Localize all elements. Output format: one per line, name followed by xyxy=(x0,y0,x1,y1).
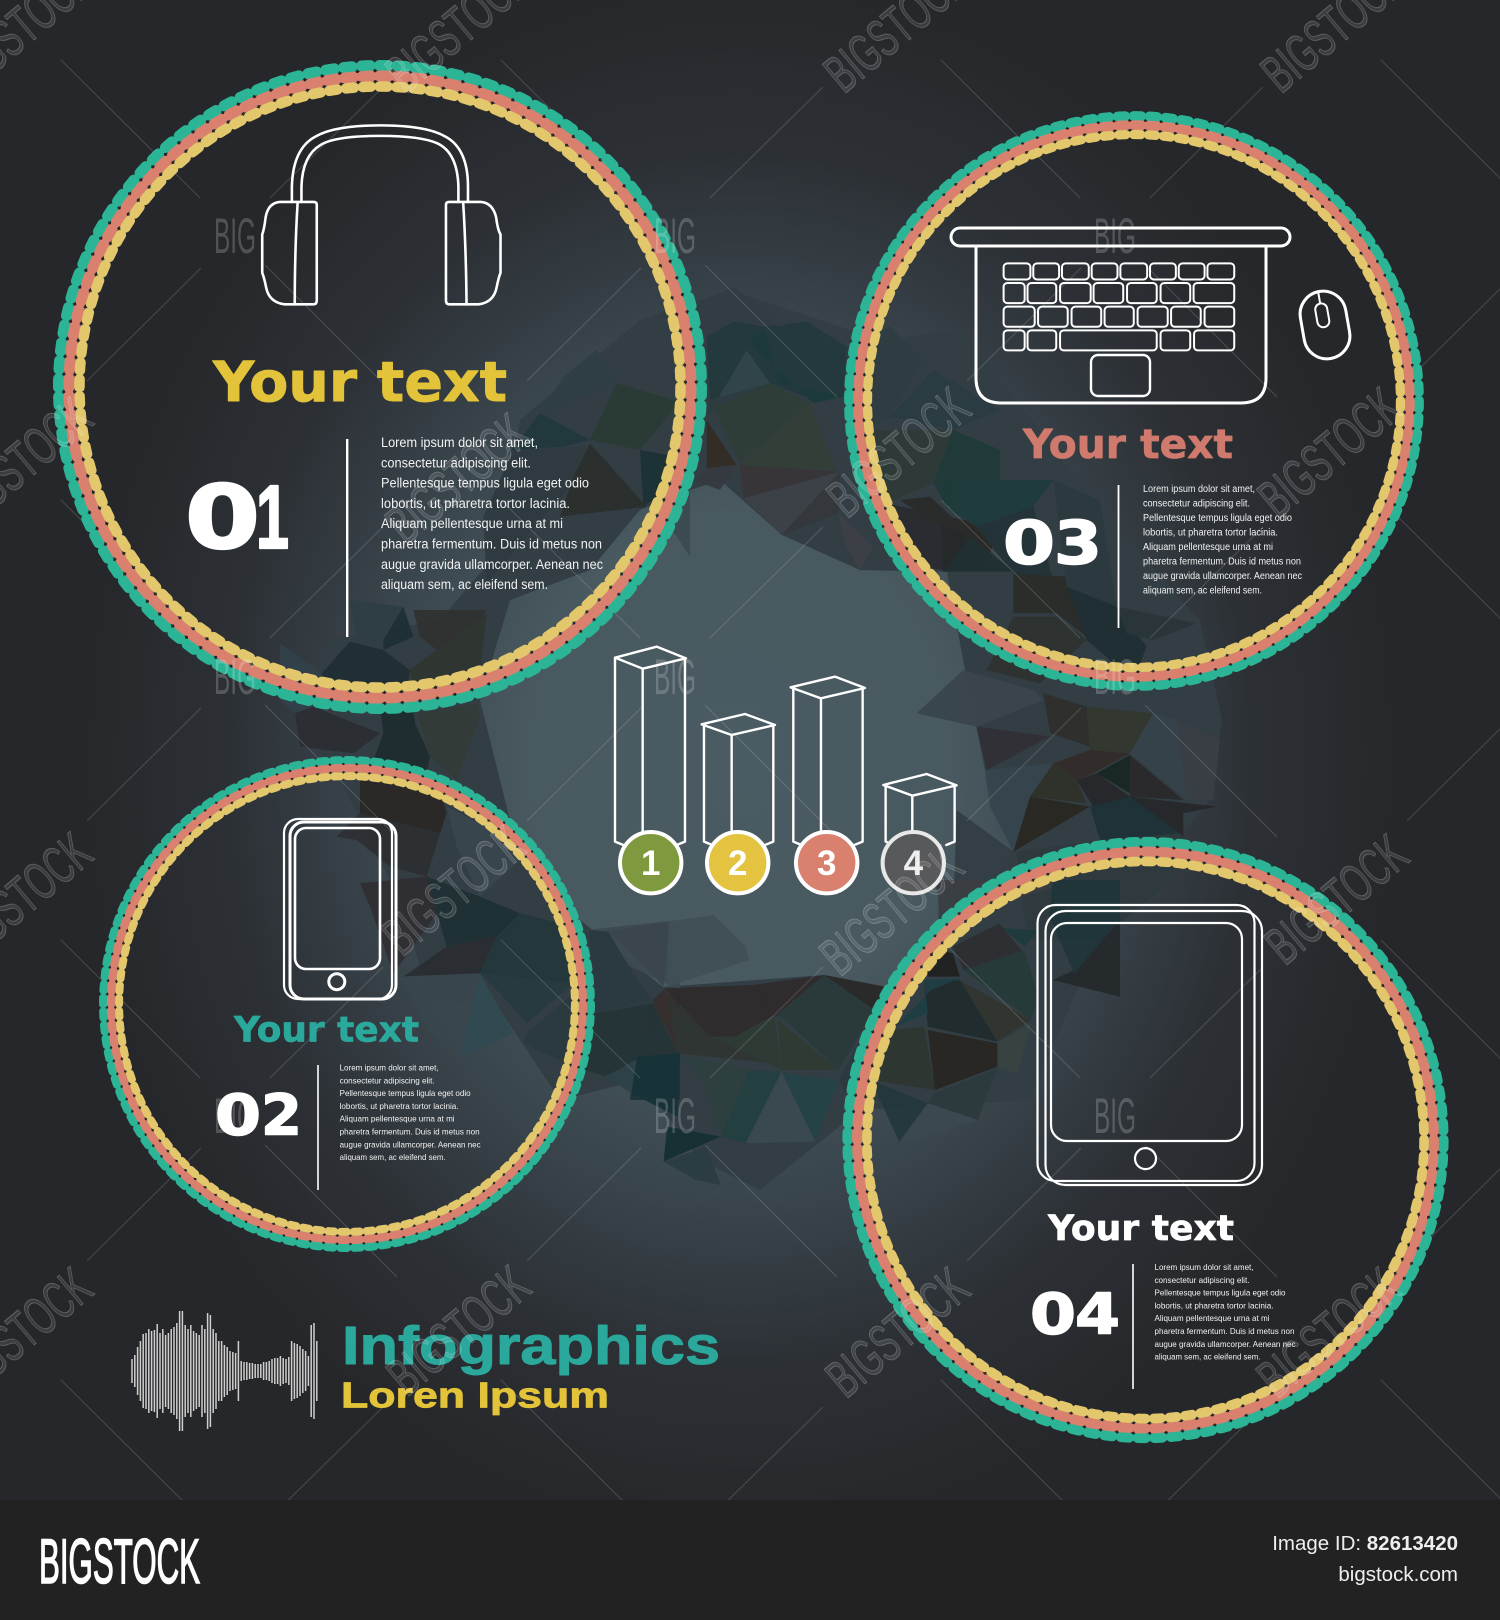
body text 03 xyxy=(1143,484,1302,596)
body text 03: augue gravida ullamcorper. Aenean nec xyxy=(1143,571,1302,582)
body text 03: Lorem ipsum dolor sit amet, xyxy=(1143,484,1255,495)
body text 02: lobortis, ut pharetra tortor lacinia. xyxy=(340,1101,459,1111)
ring 01 xyxy=(58,66,702,708)
badge 1: 1 xyxy=(641,844,660,883)
watermarks: BIGSTOCK xyxy=(376,1255,541,1407)
main title: Infographics xyxy=(342,1316,720,1376)
number 02: 2 xyxy=(261,1084,302,1148)
circle panel 01 xyxy=(58,66,702,708)
number 04: 4 xyxy=(1075,1282,1120,1348)
icon: smartphone xyxy=(284,819,396,999)
body text 01: consectetur adipiscing elit. xyxy=(381,455,531,470)
watermarks: BIG xyxy=(654,1088,696,1144)
body text 02: consectetur adipiscing elit. xyxy=(340,1075,435,1085)
badge 1 xyxy=(620,832,681,893)
icon: headphones xyxy=(262,125,501,304)
body text 04 xyxy=(1154,1262,1296,1362)
subtitle: Loren Ipsum xyxy=(341,1375,609,1416)
icon: mouse xyxy=(1296,288,1354,362)
number 03: 0 xyxy=(1003,508,1055,578)
heading 04: Your text xyxy=(1047,1209,1234,1249)
body text 03: lobortis, ut pharetra tortor lacinia. xyxy=(1143,528,1278,538)
body text 02: Pellentesque tempus ligula eget odio xyxy=(340,1088,471,1098)
body text 03: pharetra fermentum. Duis id metus non xyxy=(1143,556,1301,568)
footer site: bigstock.com xyxy=(1338,1563,1458,1586)
body text 02 xyxy=(340,1062,481,1162)
divider 03 xyxy=(1118,485,1119,628)
body text 04: consectetur adipiscing elit. xyxy=(1154,1275,1250,1285)
watermarks: BIG xyxy=(1094,649,1136,705)
number 03: 3 xyxy=(1054,508,1102,578)
body text 04: lobortis, ut pharetra tortor lacinia. xyxy=(1154,1300,1274,1310)
number 01: 1 xyxy=(256,468,289,568)
body text 04: Aliquam pellentesque urna at mi xyxy=(1154,1313,1270,1323)
watermarks: BIG xyxy=(214,208,256,264)
body text 01: lobortis, ut pharetra tortor lacinia. xyxy=(381,496,570,511)
body text 01 xyxy=(381,435,603,592)
watermarks: BIG xyxy=(1094,208,1136,264)
watermarks: BIGSTOCK xyxy=(816,377,981,529)
body text 04: augue gravida ullamcorper. Aenean nec xyxy=(1154,1339,1296,1349)
body text 02: Lorem ipsum dolor sit amet, xyxy=(340,1062,439,1072)
body text 03: consectetur adipiscing elit. xyxy=(1143,498,1250,510)
badge 2: 2 xyxy=(728,844,747,883)
body text 01: Lorem ipsum dolor sit amet, xyxy=(381,435,538,450)
watermarks: BIGSTOCK xyxy=(375,403,540,555)
text: BIGSTOCK xyxy=(39,1527,200,1597)
watermarks: BIGSTOCK xyxy=(371,815,536,967)
badge 3: 3 xyxy=(817,844,836,883)
body text 01: aliquam sem, ac eleifend sem. xyxy=(381,577,548,592)
circle panel 03 xyxy=(849,116,1419,686)
watermarks: BIG xyxy=(654,649,696,705)
body text 03: Pellentesque tempus ligula eget odio xyxy=(1143,513,1292,524)
body text 04: Pellentesque tempus ligula eget odio xyxy=(1154,1288,1286,1298)
body text 01: augue gravida ullamcorper. Aenean nec xyxy=(381,557,603,572)
watermarks: BIGSTOCK xyxy=(809,835,974,987)
footer image id: Image ID: 82613420 xyxy=(1272,1532,1458,1555)
low-poly mesh ring xyxy=(280,287,1222,1190)
keyboard keys xyxy=(1004,263,1234,350)
divider 04 xyxy=(1132,1264,1134,1389)
divider 01 xyxy=(346,439,348,637)
heading 03: Your text xyxy=(1022,422,1233,468)
divider 02 xyxy=(317,1065,319,1190)
bar 3 xyxy=(791,677,865,845)
watermarks: BIG xyxy=(654,208,696,264)
bar 1 xyxy=(615,647,686,845)
circle panel 02 xyxy=(103,760,591,1248)
badge 4 xyxy=(883,832,944,893)
centre 3D bar chart xyxy=(615,647,957,893)
watermarks: BIGSTOCK xyxy=(1246,1257,1411,1409)
badge 3 xyxy=(796,832,857,893)
heading 01: Your text xyxy=(212,350,507,414)
body text 01: Pellentesque tempus ligula eget odio xyxy=(381,476,589,491)
body text 01: Aliquam pellentesque urna at mi xyxy=(381,516,563,531)
body text 03: Aliquam pellentesque urna at mi xyxy=(1143,542,1273,553)
body text 03: aliquam sem, ac eleifend sem. xyxy=(1143,586,1262,596)
heading 02: Your text xyxy=(233,1010,419,1050)
body text 01: pharetra fermentum. Duis id metus non xyxy=(381,536,602,552)
watermarks: BIG xyxy=(1094,1088,1136,1144)
body text 02: pharetra fermentum. Duis id metus non xyxy=(340,1126,480,1136)
number 01: 0 xyxy=(185,467,260,569)
badge 4: 4 xyxy=(904,844,924,883)
bar 4 xyxy=(883,774,957,845)
trackpad xyxy=(1091,355,1150,396)
main title xyxy=(341,1316,720,1416)
ring 03 xyxy=(849,116,1419,686)
watermarks: BIGSTOCK xyxy=(1247,377,1412,529)
icon: laptop xyxy=(951,228,1290,403)
watermarks: BIG xyxy=(214,1088,256,1144)
icon: tablet xyxy=(1038,905,1262,1185)
body text 02: Aliquam pellentesque urna at mi xyxy=(340,1114,455,1124)
ring 02 xyxy=(103,760,591,1248)
bar 2 xyxy=(702,714,775,845)
circle panel 04 xyxy=(848,842,1444,1438)
number 02: 0 xyxy=(215,1084,261,1148)
watermarks: BIGSTOCK xyxy=(1254,824,1419,976)
watermarks: BIGSTOCK xyxy=(815,1257,980,1409)
watermarks: BIG xyxy=(214,649,256,705)
body text 02: aliquam sem, ac eleifend sem. xyxy=(340,1152,446,1162)
body text 04: aliquam sem, ac eleifend sem. xyxy=(1154,1352,1260,1362)
body text 04: pharetra fermentum. Duis id metus non xyxy=(1154,1326,1295,1336)
ring 04 xyxy=(848,842,1444,1438)
body text 04: Lorem ipsum dolor sit amet, xyxy=(1154,1262,1254,1272)
body text 02: augue gravida ullamcorper. Aenean nec xyxy=(340,1139,481,1149)
footer bar xyxy=(0,1500,1500,1620)
icon: sound wave xyxy=(132,1311,317,1431)
number 04: 0 xyxy=(1030,1282,1076,1348)
badge 2 xyxy=(707,832,768,893)
